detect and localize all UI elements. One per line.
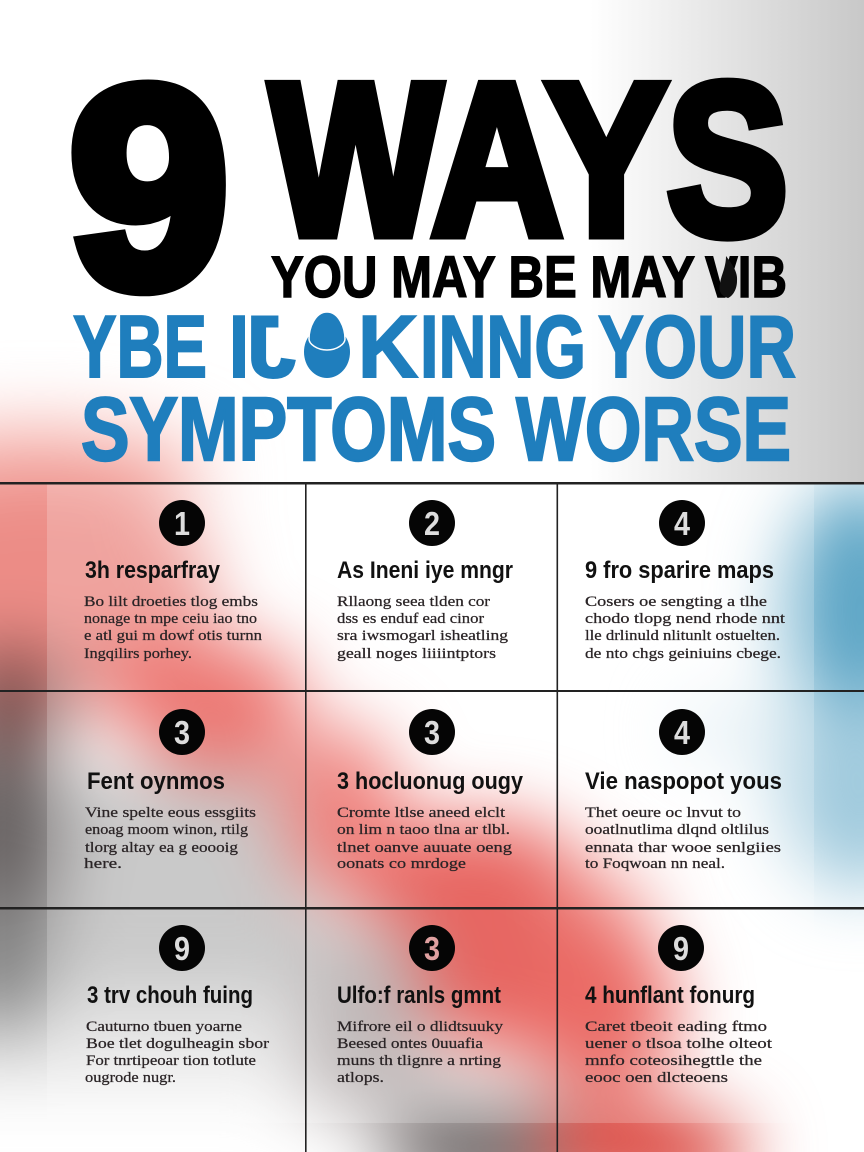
body text: sra iwsmogarl isheatling (337, 628, 508, 644)
heading: Vie naspopot yous (585, 768, 782, 795)
headline: blue line one: K (358, 297, 418, 396)
body text: Bo lilt droeties tlog embs (84, 594, 258, 610)
number badge 3: 3 (174, 714, 190, 751)
heading: Ulfo:f ranls gmnt (337, 982, 501, 1009)
heading: 4 hunflant fonurg (585, 982, 755, 1009)
body text: Cosers oe sengting a tlhe (585, 594, 767, 610)
body text: Mifrore eil o dlidtsuuky (337, 1019, 504, 1035)
number badge 3 (159, 709, 205, 755)
body text: oonats co mrdoge (337, 856, 466, 872)
number badge 3 (409, 709, 455, 755)
body text: Rllaong seea tlden cor (337, 594, 490, 610)
panel: item 7 (85, 925, 269, 1086)
number badge 2: 2 (424, 505, 440, 542)
body text: Beesed ontes 0uuafia (337, 1036, 484, 1052)
icon: blue droplet (304, 312, 350, 378)
body text: ennata thar wooe senlgiies (585, 840, 781, 856)
body text (337, 594, 508, 662)
body text: ooatlnutlima dlqnd oltlilus (585, 822, 769, 838)
body text: here. (84, 856, 122, 872)
body text: chodo tlopg nend rhode nnt (585, 611, 785, 627)
panel overlay (47, 484, 814, 1123)
body text: dss es enduf ead cinor (337, 611, 484, 627)
headline: blue line one: J (246, 297, 296, 396)
number badge 1: 1 (174, 505, 190, 542)
body text (337, 1019, 504, 1086)
body text: to Foqwoan nn neal. (585, 856, 725, 872)
panel: item 5 (337, 709, 524, 872)
body text: de nto chgs geiniuins cbege. (585, 646, 781, 662)
body text: e atl gui m dowf otis turnn (84, 628, 263, 644)
number badge 9: 9 (673, 930, 689, 967)
panel: item 2 (337, 500, 513, 662)
panel: item 1 (84, 500, 263, 662)
headline: blue line one: INNG (420, 297, 586, 396)
heading: 9 fro sparire maps (585, 557, 774, 584)
subtitle: black line: VIB (705, 245, 787, 310)
number badge 2 (409, 500, 455, 546)
headline: blue line one: YBE (73, 297, 207, 396)
body text: muns th tlignre a nrting (337, 1053, 501, 1069)
number badge 4 (659, 709, 705, 755)
body text: Thet oeure oc lnvut to (585, 805, 741, 821)
number badge 1 (159, 500, 205, 546)
body text (84, 594, 263, 662)
grid lines (0, 482, 864, 1152)
body text: Ingqilirs porhey. (84, 646, 192, 662)
body text: atlops. (337, 1070, 384, 1086)
body text: uener o tlsoa tolhe olteot (585, 1036, 772, 1052)
body text (585, 805, 781, 872)
panel: item 3 (585, 500, 785, 662)
subtitle: black line: YOU MAY BE MAY (271, 245, 695, 310)
number badge 4 (659, 500, 705, 546)
heading: Fent oynmos (87, 768, 225, 795)
body text: tlnet oanve auuate oeng (337, 840, 512, 856)
body text: ougrode nugr. (85, 1070, 176, 1086)
number badge 3: 3 (424, 930, 440, 967)
number badge 3: 3 (424, 714, 440, 751)
number badge 4: 4 (674, 505, 691, 542)
body text: Cauturno tbuen yoarne (86, 1019, 242, 1035)
heading: 3 hocluonug ougy (337, 768, 524, 795)
body text (585, 594, 785, 662)
body text: mnfo coteosihegttle the (585, 1053, 762, 1069)
number badge 9 (159, 925, 205, 971)
body text: Cromte ltlse aneed elclt (337, 805, 505, 821)
panel: item 9 (585, 925, 772, 1086)
panel: item 8 (337, 925, 504, 1086)
body text: eooc oen dlcteoens (585, 1070, 728, 1086)
number badge 4: 4 (674, 714, 691, 751)
heading: 3h resparfray (85, 557, 221, 584)
number badge 9 (658, 925, 704, 971)
body text: Boe tlet dogulheagin sbor (86, 1036, 269, 1052)
heading: As Ineni iye mngr (337, 557, 513, 584)
heading: 3 trv chouh fuing (87, 982, 253, 1009)
body text: For tnrtipeoar tion totlute (86, 1053, 256, 1069)
body text (84, 805, 256, 872)
title: big number nine: 9 (69, 29, 229, 347)
headline: blue line one: YOUR (598, 297, 796, 396)
body text (585, 1019, 772, 1086)
body text: nonage tn mpe ceiu iao tno (84, 611, 257, 627)
body text: geall noges liiiintptors (337, 646, 496, 662)
body text (337, 805, 512, 872)
body text: on lim n taoo tlna ar tlbl. (337, 822, 510, 838)
number badge 3 (409, 925, 455, 971)
headline: blue line one (73, 297, 796, 396)
headline: blue line one: I (229, 297, 249, 396)
number badge 9: 9 (174, 930, 190, 967)
body text: tlorg altay ea g eoooig (85, 840, 238, 856)
body text: Vine spelte eous essgiits (85, 805, 256, 821)
panel: item 6 (585, 709, 782, 872)
body text (85, 1019, 269, 1086)
panel: item 4 (84, 709, 256, 872)
body text: enoag moom winon, rtilg (85, 822, 248, 838)
body text: Caret tbeoit eading ftmo (585, 1019, 767, 1035)
body text: lle drlinuld nlitunlt ostuelten. (585, 628, 780, 644)
